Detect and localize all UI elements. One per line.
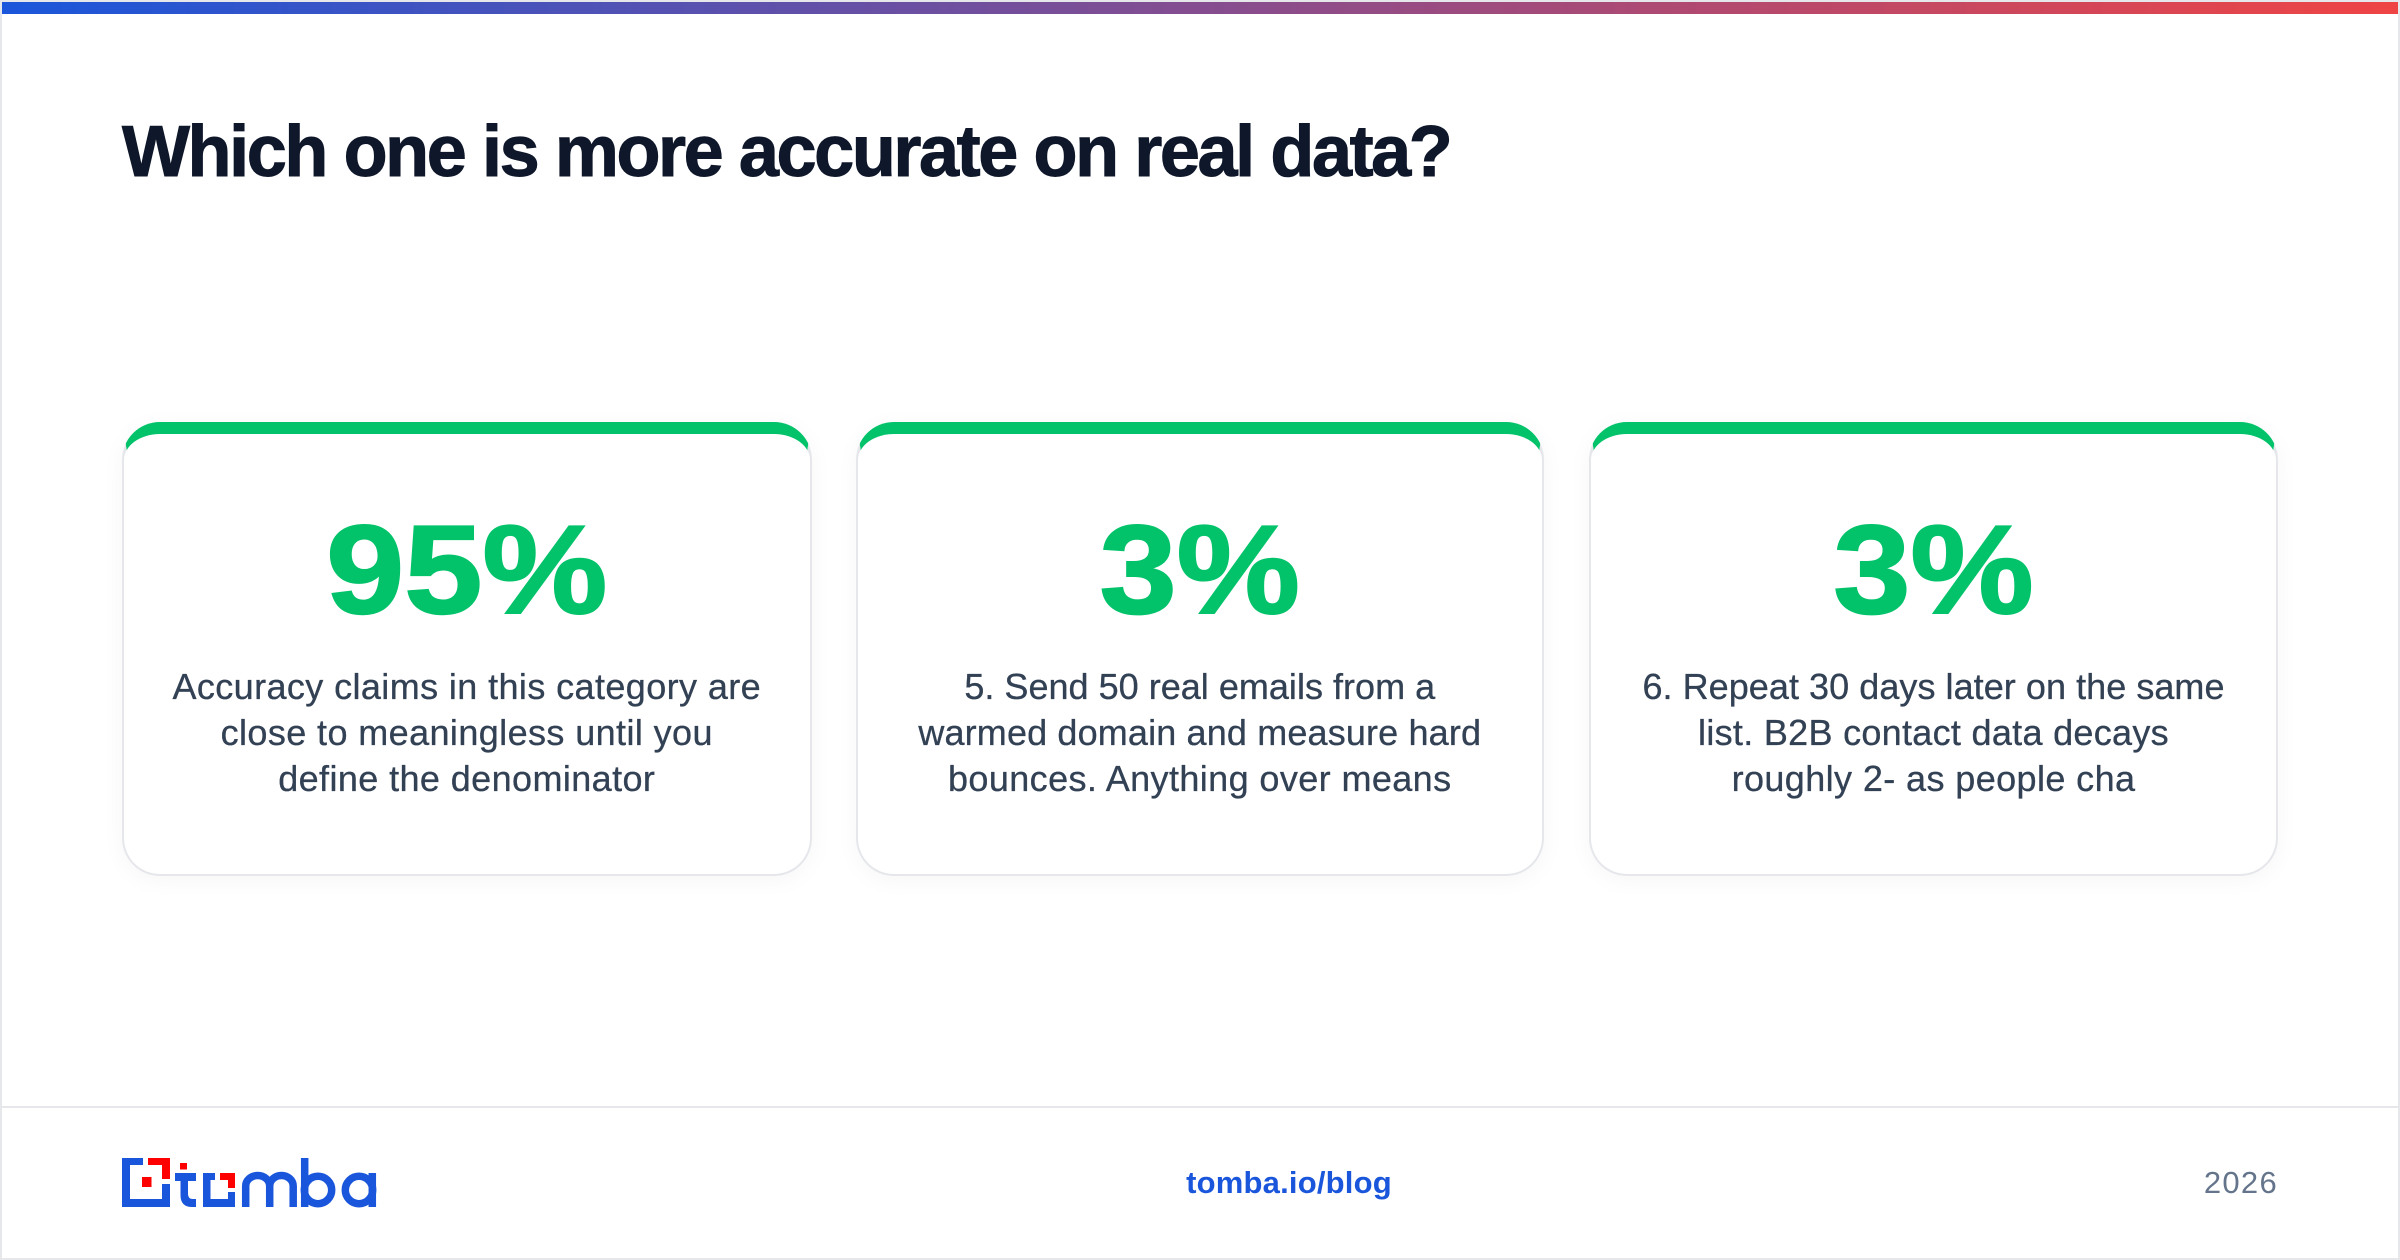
stat description: list. B2B contact data decays: [1698, 712, 2169, 753]
stat description: roughly 2- as people cha: [1732, 758, 2135, 799]
stat description: define the denominator: [278, 758, 655, 799]
stat description: 6. Repeat 30 days later on the same: [1642, 666, 2225, 707]
stat description: Accuracy claims in this category are: [172, 666, 761, 707]
stat description: [918, 666, 1481, 799]
logo: tomba: [122, 1158, 376, 1208]
panel: stat card 3% repeat: [1589, 422, 2278, 876]
stat value: 3%: [1833, 499, 2034, 640]
stat description: [1642, 666, 2225, 799]
top gradient bar: [2, 2, 2398, 14]
footer link: tomba.io/blog: [1186, 1165, 1392, 1200]
panel: stat card 3% send emails: [856, 422, 1544, 876]
footer year: 2026: [2204, 1165, 2278, 1200]
stat description: [172, 666, 761, 799]
stat description: warmed domain and measure hard: [918, 712, 1481, 753]
stat description: close to meaningless until you: [221, 712, 713, 753]
stat value: 95%: [326, 499, 607, 640]
stat description: bounces. Anything over means: [948, 758, 1452, 799]
panel: stat card 95%: [122, 422, 812, 876]
stat description: 5. Send 50 real emails from a: [964, 666, 1435, 707]
stat value: 3%: [1100, 499, 1300, 640]
title: Which one is more accurate on real data?: [122, 112, 1450, 192]
